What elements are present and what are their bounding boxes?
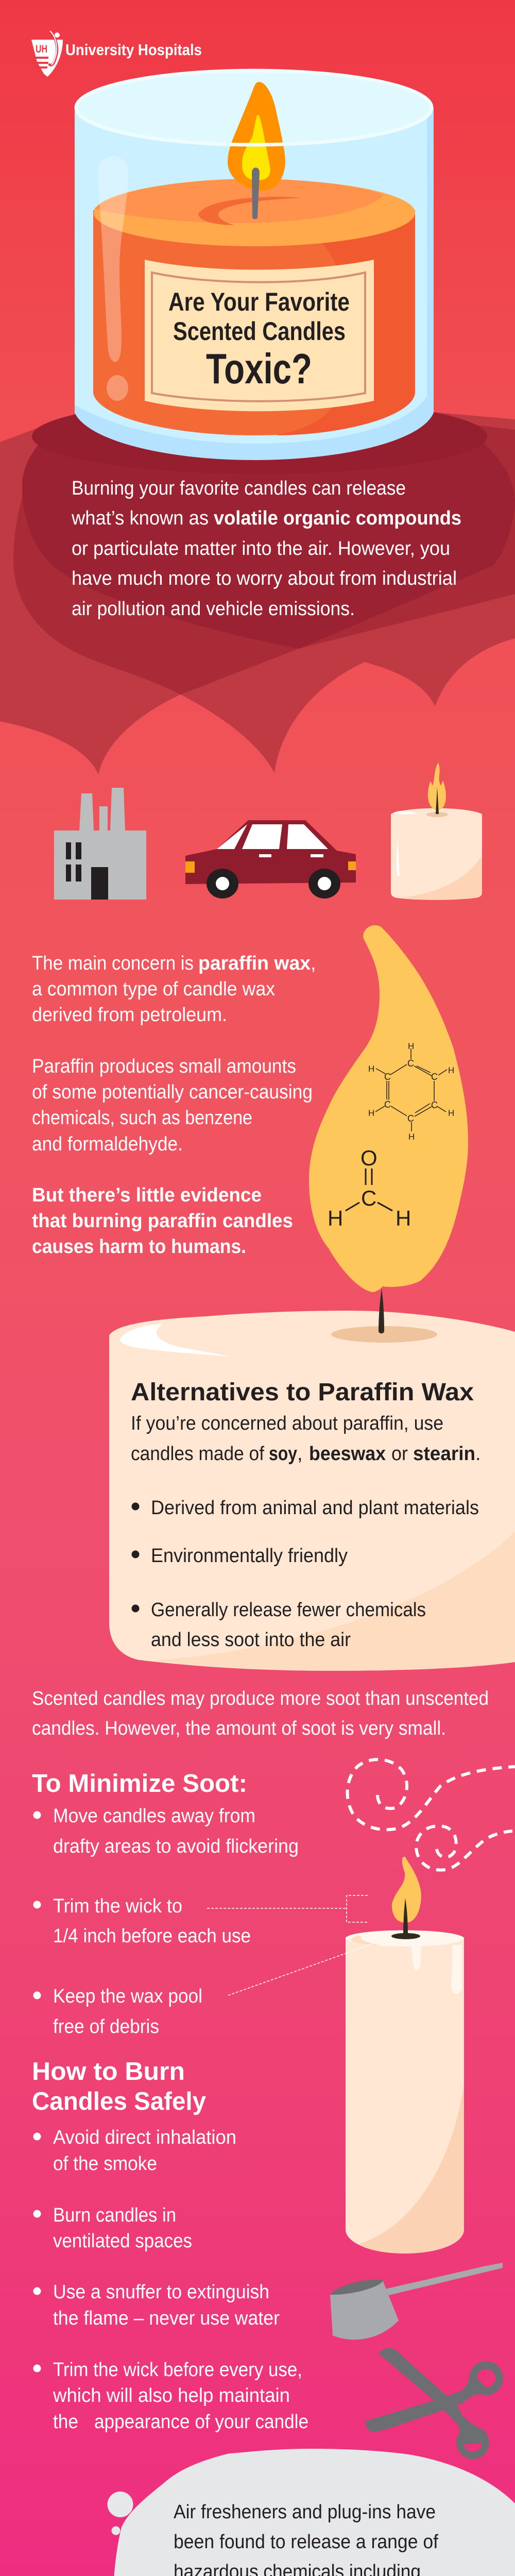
callout lines: wick and wax pool <box>207 1895 381 1995</box>
bullet list: minimize soot: 1/4 inch before each use <box>53 1925 251 1947</box>
text: alternatives intro <box>131 1413 481 1465</box>
chemical structure: formaldehyde: C <box>361 1186 376 1210</box>
smoke clouds <box>0 399 515 774</box>
chemical structure: benzene: C <box>407 1113 414 1124</box>
text: air fresheners: Air fresheners and plug-ins have <box>174 2501 436 2523</box>
text: air fresheners <box>173 2501 462 2576</box>
logo: University Hospitals: UH <box>36 43 47 55</box>
bullet list: burn safely: which will also help maintain <box>53 2385 290 2406</box>
logo: University Hospitals: University Hospitals <box>65 41 202 59</box>
icon: scissors <box>365 2348 503 2459</box>
bullet list: minimize soot: drafty areas to avoid flickering <box>53 1836 299 1857</box>
heading: to minimize soot: To Minimize Soot: <box>32 1770 247 1798</box>
chemical structure: benzene: C <box>431 1100 438 1110</box>
bullet list: burn safely: the <box>53 2411 78 2433</box>
text: paraffin concern: paraffin wax <box>198 953 311 974</box>
text: alternatives intro: stearin <box>413 1443 475 1465</box>
intro text: what’s known as <box>71 507 209 529</box>
chemical structure: benzene: H <box>368 1064 374 1074</box>
bullet list: alternatives benefits: Environmentally friendly <box>151 1545 348 1567</box>
text: paraffin concern: a common type of candle wax <box>32 978 275 1000</box>
title: Scented Candles <box>173 317 346 346</box>
intro text <box>71 478 461 620</box>
text: paraffin concern: , <box>311 953 316 974</box>
chemical structure: benzene: C <box>407 1058 414 1069</box>
icon: candle snuffer <box>330 2263 503 2340</box>
heading: how to burn candles safely: How to Burn <box>32 2058 185 2086</box>
icon: tall candle <box>346 1857 464 2253</box>
chemical structure: benzene: H <box>448 1108 454 1118</box>
text: scented candles soot <box>32 1688 489 1739</box>
text: paraffin concern: derived from petroleum. <box>32 1004 227 1026</box>
chemical structure: benzene: C <box>384 1072 391 1082</box>
heading: how to burn candles safely <box>32 2058 206 2115</box>
panel: large candle with paraffin alternatives <box>109 1289 515 1671</box>
chemical structure: benzene: H <box>408 1132 415 1142</box>
icon: dashed smoke spirals <box>348 1759 515 1870</box>
text: scented candles soot: candles. However, the amount of soot is very small. <box>32 1718 446 1739</box>
text: paraffin concern: The main concern is <box>32 953 194 974</box>
bullet list: burn safely: Use a snuffer to extinguish <box>53 2281 269 2303</box>
heading: Alternatives to Paraffin Wax <box>131 1379 474 1406</box>
chemical structure: formaldehyde <box>328 1146 411 1230</box>
bullet list: burn safely: ventilated spaces <box>53 2230 192 2252</box>
text: paraffin concern: Paraffin produces small amounts <box>32 1056 296 1077</box>
chemical structure: formaldehyde: H <box>328 1206 343 1230</box>
bullet list: minimize soot: Trim the wick to <box>53 1895 182 1917</box>
vapor bubbles <box>107 2492 463 2576</box>
bullet list: minimize soot: Move candles away from <box>53 1805 255 1827</box>
logo: University Hospitals <box>31 31 202 77</box>
bullet list: alternatives benefits <box>132 1497 479 1651</box>
chemical structure: benzene: H <box>368 1108 374 1118</box>
text: paraffin concern: chemicals, such as benzene <box>32 1107 252 1129</box>
chemical structure: benzene: C <box>384 1099 391 1110</box>
text: alternatives intro: . <box>475 1443 481 1465</box>
bullet list: burn safely: Trim the wick before every use, <box>53 2359 302 2381</box>
bullet list: alternatives benefits: and less soot into the air <box>151 1629 351 1651</box>
bullet list: alternatives benefits: Generally release fewer chemicals <box>151 1599 426 1621</box>
text: paraffin concern: of some potentially cancer-causing <box>32 1081 313 1103</box>
text: paraffin concern: But there’s little evidence <box>32 1184 262 1206</box>
bullet list: alternatives benefits: Derived from animal and plant materials <box>151 1497 479 1519</box>
chemical structure: benzene: C <box>431 1072 438 1082</box>
text: alternatives intro: candles made of <box>131 1443 264 1465</box>
intro text: have much more to worry about from industrial <box>72 568 457 589</box>
bullet list: burn safely: of the smoke <box>53 2153 157 2175</box>
bullet list: burn safely: Burn candles in <box>53 2205 176 2226</box>
text: alternatives intro: beeswax <box>309 1443 386 1465</box>
text: paraffin concern: that burning paraffin candles <box>32 1210 293 1232</box>
bullet list: minimize soot: free of debris <box>53 2016 159 2038</box>
chemical structure: formaldehyde: O <box>360 1146 377 1170</box>
large flame with chemical structures <box>309 925 468 1292</box>
text: alternatives intro: or <box>391 1443 408 1465</box>
bullet list: minimize soot <box>33 1805 299 2038</box>
chemical structure: benzene: H <box>408 1041 414 1051</box>
text: air fresheners: been found to release a range of <box>174 2531 438 2553</box>
text: alternatives intro: , <box>297 1443 303 1465</box>
bullet list: burn safely: appearance of your candle <box>94 2411 308 2433</box>
intro text: air pollution and vehicle emissions. <box>72 598 355 620</box>
bullet list: burn safely: the flame – never use water <box>53 2308 280 2329</box>
chemical structure: formaldehyde: H <box>396 1206 411 1230</box>
bullet list: minimize soot: Keep the wax pool <box>53 1986 202 2007</box>
icon: small candle <box>391 762 482 900</box>
bullet list: burn safely: Avoid direct inhalation <box>53 2127 236 2148</box>
intro text: Burning your favorite candles can release <box>72 478 406 499</box>
hero candle in glass jar <box>75 71 434 460</box>
chemical structure: benzene: H <box>448 1065 454 1075</box>
title: Toxic? <box>206 345 312 393</box>
chemical structure: benzene <box>368 1041 454 1142</box>
text: paraffin concern: causes harm to humans. <box>32 1236 246 1258</box>
title <box>168 287 350 393</box>
bullet list: burn safely <box>33 2127 308 2433</box>
speech bubble: air fresheners <box>113 2449 515 2576</box>
candle label <box>145 260 374 411</box>
text: paraffin concern: and formaldehyde. <box>32 1133 183 1155</box>
text: paraffin concern <box>32 953 316 1258</box>
intro text: or particulate matter into the air. However, you <box>72 538 450 560</box>
text: alternatives intro: If you’re concerned about paraffin, use <box>131 1413 443 1434</box>
text: scented candles soot: Scented candles may produce more soot than unscented <box>32 1688 489 1709</box>
icon: factory <box>54 788 146 900</box>
text: alternatives intro: soy <box>269 1443 297 1465</box>
heading: how to burn candles safely: Candles Safely <box>32 2088 206 2115</box>
title: Are Your Favorite <box>168 287 350 316</box>
icon: car <box>185 820 356 899</box>
intro text: volatile organic compounds <box>214 507 461 529</box>
